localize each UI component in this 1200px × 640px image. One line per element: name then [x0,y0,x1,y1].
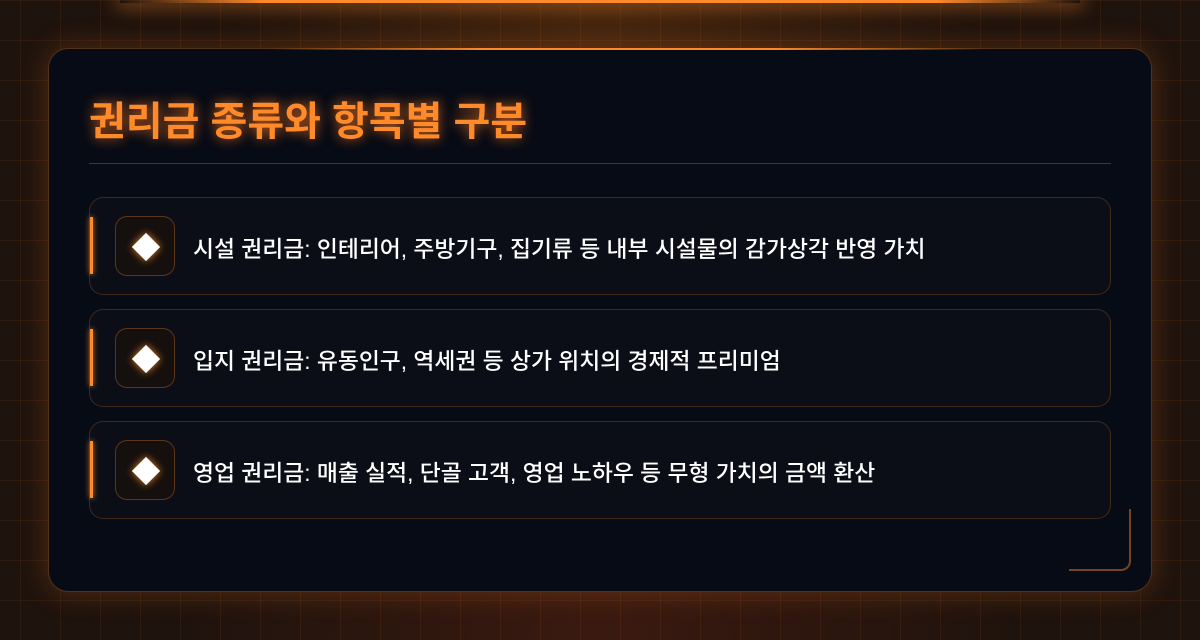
title: 권리금 종류와 항목별 구분 [89,100,527,144]
corner bracket [1069,509,1131,571]
item: location premium [89,309,1111,407]
item: business premium [89,421,1111,519]
icon: diamond [115,216,175,276]
panel: main card [48,48,1152,592]
icon: diamond [115,328,175,388]
item: facility premium [89,197,1111,295]
text: facility: 시설 권리금: 인테리어, 주방기구, 집기류 등 내부 시설물의 감가상각 반영 가치 [193,236,926,262]
text: location: 입지 권리금: 유동인구, 역세권 등 상가 위치의 경제적 프리미엄 [193,348,781,374]
text: business: 영업 권리금: 매출 실적, 단골 고객, 영업 노하우 등 무형 가치의 금액 환산 [193,460,875,486]
icon: diamond [115,440,175,500]
